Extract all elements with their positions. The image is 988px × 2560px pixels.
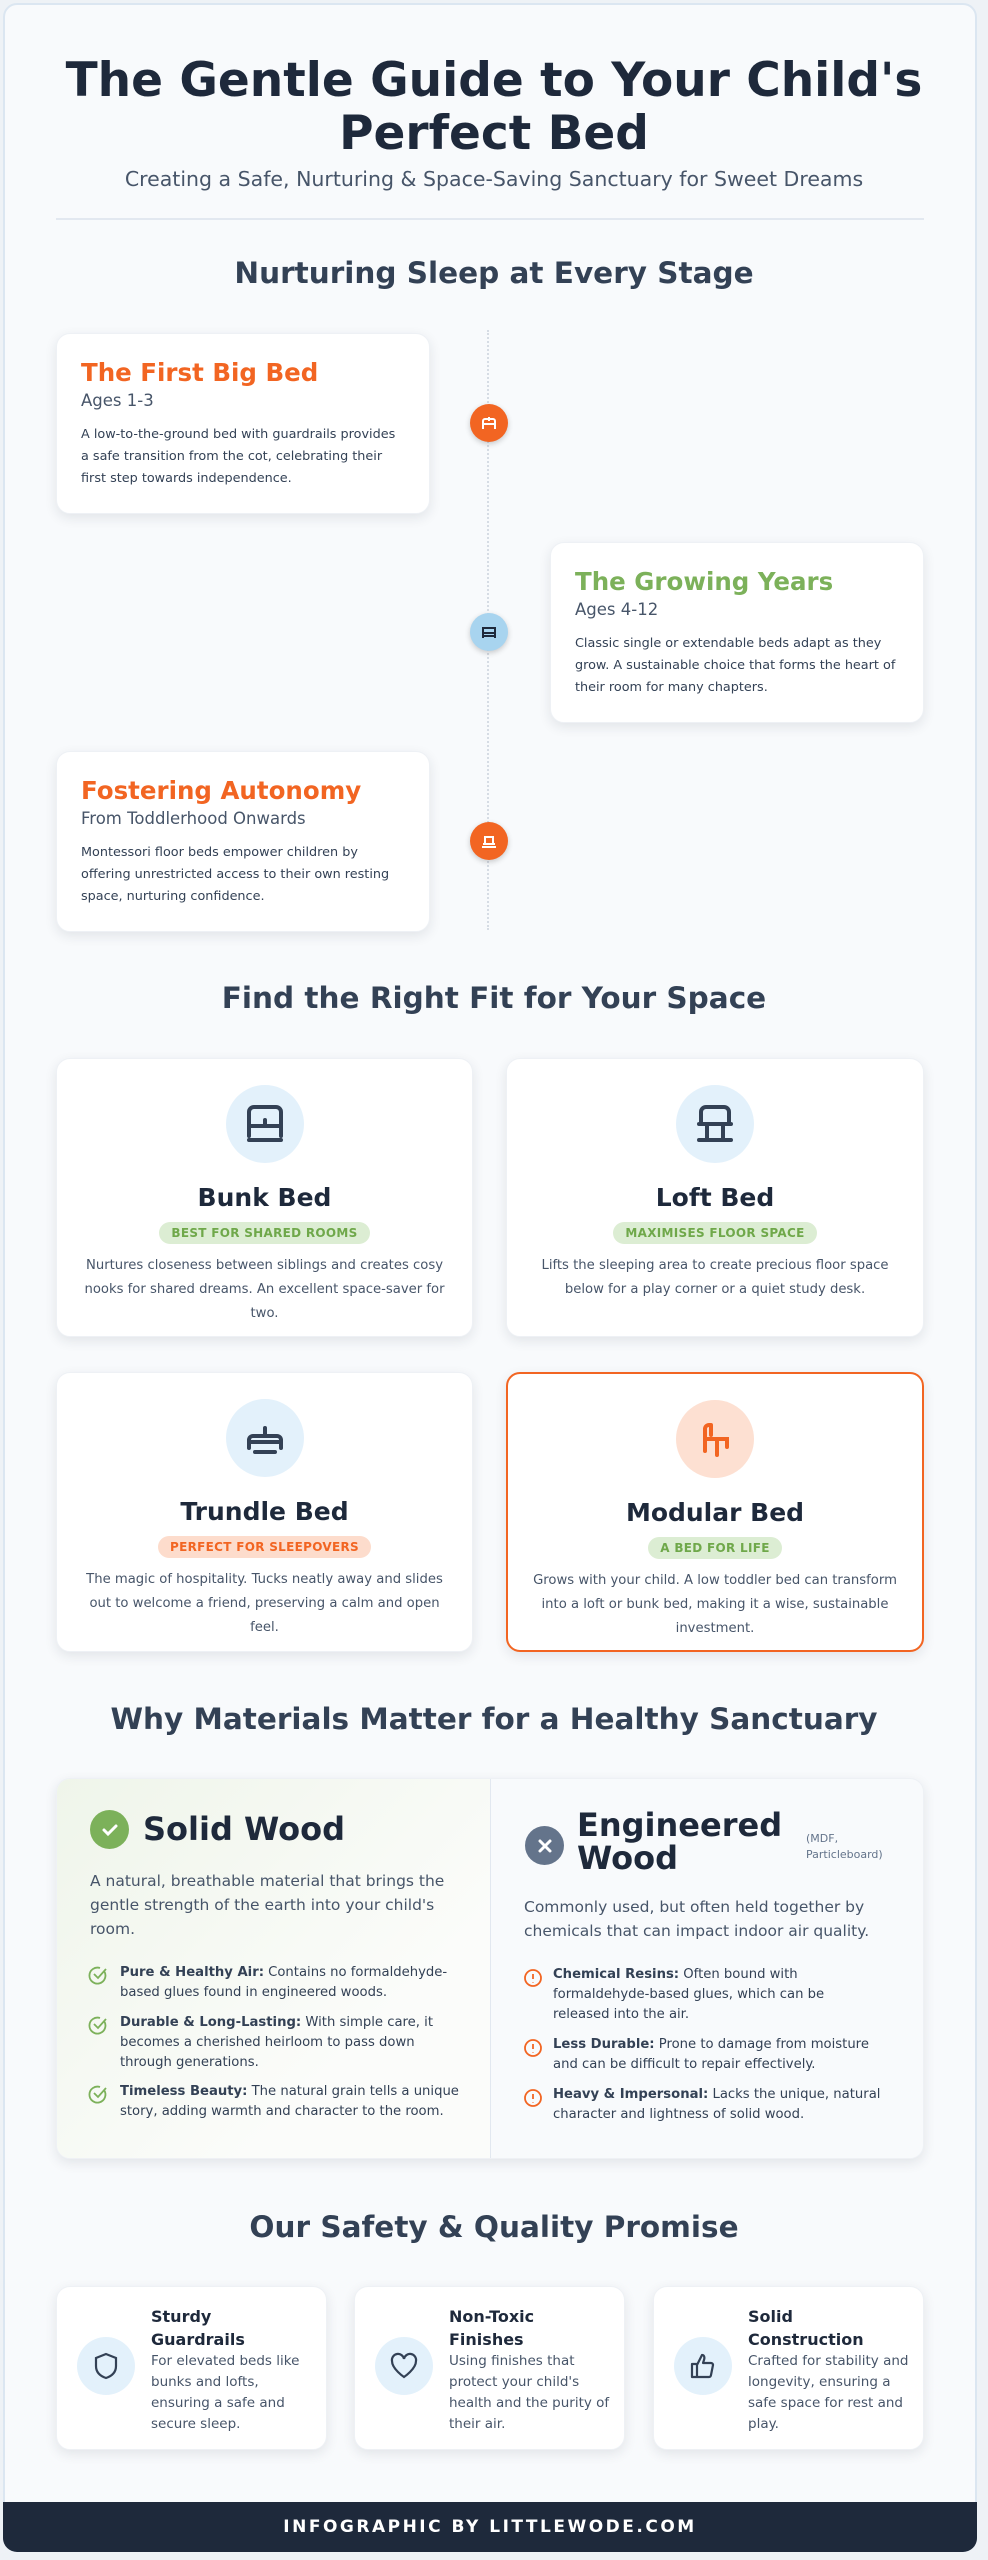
engineered wood column: Commonly used, but often held together by chemicals that can impact indoor air quality. bbox=[524, 1898, 869, 1940]
card: non-toxic finishes: Using finishes that protect your child's health and the purity of their air. bbox=[449, 2353, 609, 2432]
card: growing years: Ages 4-12 bbox=[575, 600, 658, 619]
card: growing years bbox=[550, 542, 924, 723]
card: first big bed: A low-to-the-ground bed with guardrails provides a safe transition from the cot, celebrating their first step towards independence. bbox=[81, 427, 395, 486]
card: sturdy guardrails: For elevated beds like bunks and lofts, ensuring a safe and secure sleep. bbox=[151, 2353, 299, 2432]
card: bunk bed: Bunk Bed bbox=[198, 1183, 331, 1212]
card: sturdy guardrails: Sturdy Guardrails bbox=[151, 2307, 245, 2349]
card: fostering autonomy bbox=[56, 751, 430, 932]
solid wood column: Timeless Beauty: The natural grain tells a unique story, adding warmth and character to the room. bbox=[120, 2084, 459, 2119]
heading: stages: Nurturing Sleep at Every Stage bbox=[234, 256, 754, 290]
solid wood column: Pure & Healthy Air: Contains no formaldehyde-based glues found in engineered woods. bbox=[120, 1965, 447, 2000]
icon: grey x bbox=[525, 1826, 564, 1865]
card: trundle bed bbox=[56, 1372, 473, 1652]
card: solid construction: Solid Construction bbox=[748, 2307, 864, 2349]
card: fostering autonomy: Fostering Autonomy bbox=[81, 776, 361, 805]
engineered wood column: Particleboard) bbox=[806, 1848, 883, 1861]
heading: materials: Why Materials Matter for a Healthy Sanctuary bbox=[110, 1702, 878, 1736]
solid wood column: A natural, breathable material that brings the gentle strength of the earth into your child's room. bbox=[90, 1872, 444, 1938]
engineered wood column bbox=[524, 1806, 883, 2122]
subtitle: Creating a Safe, Nurturing & Space-Saving Sanctuary for Sweet Dreams bbox=[125, 167, 863, 191]
solid wood column: Solid Wood bbox=[143, 1810, 345, 1848]
card: loft bed bbox=[506, 1058, 924, 1337]
card: bunk bed bbox=[56, 1058, 473, 1337]
card: modular bed: Grows with your child. A low toddler bed can transform into a loft or bunk bed, making it a wise, sustainable investment. bbox=[533, 1573, 897, 1636]
icon: green check bbox=[90, 1810, 129, 1849]
card: solid construction: Crafted for stability and longevity, ensuring a safe space for rest and play. bbox=[748, 2353, 908, 2432]
panel: materials comparison bbox=[56, 1778, 924, 2159]
card: fostering autonomy: Montessori floor beds empower children by offering unrestricted access to their own resting space, nurturing confidence. bbox=[81, 845, 389, 904]
heading: promise: Our Safety & Quality Promise bbox=[249, 2210, 739, 2244]
card: bunk bed: Nurtures closeness between siblings and creates cosy nooks for shared dreams. An excellent space-saver for two. bbox=[84, 1258, 445, 1321]
card: fostering autonomy: From Toddlerhood Onwards bbox=[81, 809, 306, 828]
card: first big bed bbox=[56, 333, 430, 514]
footer bbox=[3, 2502, 977, 2552]
solid wood column bbox=[88, 1810, 459, 2119]
card: modular bed: A BED FOR LIFE bbox=[660, 1541, 770, 1555]
footer: INFOGRAPHIC BY LITTLEWODE.COM bbox=[283, 2517, 697, 2537]
card: bunk bed: BEST FOR SHARED ROOMS bbox=[171, 1226, 358, 1240]
card: non-toxic finishes bbox=[354, 2286, 625, 2450]
card: trundle bed: PERFECT FOR SLEEPOVERS bbox=[170, 1540, 359, 1554]
card: trundle bed: Trundle Bed bbox=[180, 1497, 349, 1526]
engineered wood column: Wood bbox=[577, 1839, 678, 1877]
card: growing years: The Growing Years bbox=[575, 567, 833, 596]
heading: right fit: Find the Right Fit for Your Space bbox=[222, 981, 766, 1015]
card: loft bed: MAXIMISES FLOOR SPACE bbox=[625, 1226, 805, 1240]
solid wood column: Durable & Long-Lasting: With simple care, it becomes a cherished heirloom to pass down through generations. bbox=[120, 2015, 433, 2070]
card: sturdy guardrails bbox=[56, 2286, 327, 2450]
card: solid construction bbox=[653, 2286, 924, 2450]
card: first big bed: The First Big Bed bbox=[81, 358, 318, 387]
title: The Gentle Guide to Your Child's bbox=[66, 53, 922, 108]
engineered wood column: (MDF, bbox=[806, 1832, 838, 1845]
card: loft bed: Loft Bed bbox=[656, 1183, 774, 1212]
engineered wood column: Heavy & Impersonal: Lacks the unique, natural character and lightness of solid wood. bbox=[553, 2087, 880, 2122]
engineered wood column: Engineered bbox=[577, 1806, 782, 1844]
card: modular bed bbox=[506, 1372, 924, 1652]
icon: timeline dot 3 bbox=[470, 822, 508, 860]
card: growing years: Classic single or extendable beds adapt as they grow. A sustainable choice that forms the heart of their room for many chapters. bbox=[575, 636, 895, 695]
icon: timeline dot 1 bbox=[470, 404, 508, 442]
card: trundle bed: The magic of hospitality. Tucks neatly away and slides out to welcome a friend, preserving a calm and open feel. bbox=[86, 1572, 443, 1635]
card: modular bed: Modular Bed bbox=[626, 1498, 804, 1527]
engineered wood column: Less Durable: Prone to damage from moisture and can be difficult to repair effectively. bbox=[553, 2037, 869, 2072]
title bbox=[66, 53, 922, 161]
icon: timeline dot 2 bbox=[470, 613, 508, 651]
card: loft bed: Lifts the sleeping area to create precious floor space below for a play corner or a quiet study desk. bbox=[541, 1258, 889, 1297]
card: first big bed: Ages 1-3 bbox=[81, 391, 154, 410]
title: Perfect Bed bbox=[339, 106, 649, 161]
card: non-toxic finishes: Non-Toxic Finishes bbox=[449, 2307, 534, 2349]
engineered wood column: Chemical Resins: Often bound with formaldehyde-based glues, which can be released into the air. bbox=[553, 1967, 824, 2022]
